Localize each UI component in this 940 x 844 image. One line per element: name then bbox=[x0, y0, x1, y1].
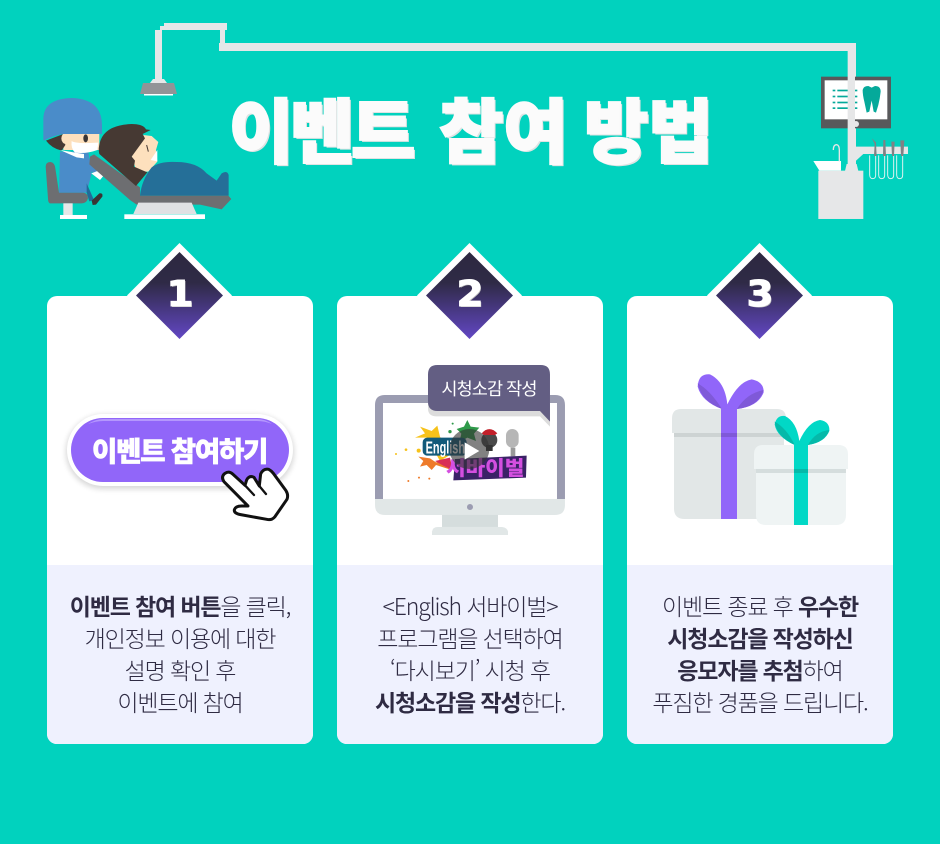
instruments bbox=[870, 155, 903, 179]
text block: step 1 description bbox=[70, 588, 290, 718]
number 1: 1 bbox=[166, 274, 193, 315]
speech bubble bbox=[428, 365, 550, 427]
text block: step 3 description: 시청소감을 작성하신 bbox=[667, 620, 853, 654]
badge: step 1 bbox=[127, 243, 232, 348]
logo plate bbox=[453, 456, 527, 480]
purple ribbon bbox=[698, 374, 764, 409]
dentist head bbox=[63, 133, 99, 150]
basin and faucet bbox=[813, 161, 841, 171]
panel: step 3 description background bbox=[627, 565, 893, 744]
icon: dental lamp arm bbox=[140, 23, 856, 170]
icon: pointing hand bbox=[223, 469, 288, 520]
surgical cap bbox=[43, 98, 102, 141]
patient chair back bbox=[89, 154, 231, 209]
video thumbnail: English survival logo: 서바이벌 bbox=[446, 457, 524, 480]
video thumbnail: English survival logo bbox=[395, 420, 527, 482]
tray arm bbox=[855, 147, 908, 162]
stars bbox=[415, 426, 450, 461]
cabinet bbox=[818, 171, 863, 219]
dark microphone bbox=[481, 432, 497, 448]
text block: step 3 description: 응모자를 추첨하여 bbox=[677, 652, 843, 686]
teal ribbon bbox=[775, 416, 829, 445]
icon: dental unit with monitor bbox=[813, 50, 908, 219]
badge: step 2 bbox=[417, 243, 522, 348]
text block: step 3 description bbox=[652, 588, 868, 718]
title: 이벤트 참여 방법 bbox=[229, 94, 713, 172]
small gift box bbox=[756, 468, 846, 525]
title: 이벤트 참여 방법: 참여 bbox=[439, 94, 568, 172]
dentist chair bbox=[46, 162, 88, 203]
text block: step 2 description: ‘다시보기’ 시청 후 bbox=[390, 652, 550, 686]
text block: step 2 description: 프로그램을 선택하여 bbox=[377, 620, 563, 654]
text block: step 1 description: 설명 확인 후 bbox=[125, 652, 235, 686]
panel: step 2 description background bbox=[337, 565, 603, 744]
bubble label: 시청소감 작성 bbox=[441, 379, 537, 399]
large gift box bbox=[674, 432, 784, 519]
text block: step 2 description bbox=[375, 588, 565, 718]
panel: step 1 card bbox=[47, 296, 313, 744]
text block: step 1 description: 이벤트 참여 버튼을 클릭, bbox=[70, 588, 290, 622]
text block: step 2 description: <English 서바이벌> bbox=[383, 588, 557, 622]
panel: step 2 card bbox=[337, 296, 603, 744]
text block: step 1 description: 개인정보 이용에 대한 bbox=[85, 620, 275, 654]
text block: step 2 description: 시청소감을 작성한다. bbox=[375, 684, 565, 718]
silver microphone bbox=[506, 429, 519, 448]
dentist body bbox=[59, 152, 92, 193]
panel: step 1 description background bbox=[47, 565, 313, 744]
icon: gift boxes bbox=[672, 374, 848, 525]
title: 이벤트 참여 방법: 이벤트 bbox=[229, 94, 412, 172]
badge: step 3 bbox=[707, 243, 812, 348]
list lines bbox=[833, 90, 857, 109]
text block: step 3 description: 이벤트 종료 후 우수한 bbox=[662, 588, 858, 622]
icon: video monitor bbox=[375, 365, 565, 535]
tooth bbox=[863, 86, 881, 113]
icon: dentist and patient bbox=[43, 98, 231, 219]
number 2: 2 bbox=[456, 274, 483, 315]
video thumbnail: English survival logo: English bbox=[426, 438, 465, 458]
blanket bbox=[140, 162, 229, 196]
number 3: 3 bbox=[746, 274, 773, 315]
patient head bbox=[132, 135, 158, 172]
button label: 이벤트 참여하기 bbox=[92, 436, 267, 467]
text block: step 1 description: 이벤트에 참여 bbox=[117, 684, 243, 718]
text block: step 3 description: 푸짐한 경품을 드립니다. bbox=[652, 684, 868, 718]
play overlay bbox=[449, 429, 489, 469]
monitor bbox=[821, 77, 891, 128]
title: 이벤트 참여 방법: 방법 bbox=[584, 94, 713, 172]
button: event participation bbox=[66, 414, 294, 489]
panel: step 3 card bbox=[627, 296, 893, 744]
